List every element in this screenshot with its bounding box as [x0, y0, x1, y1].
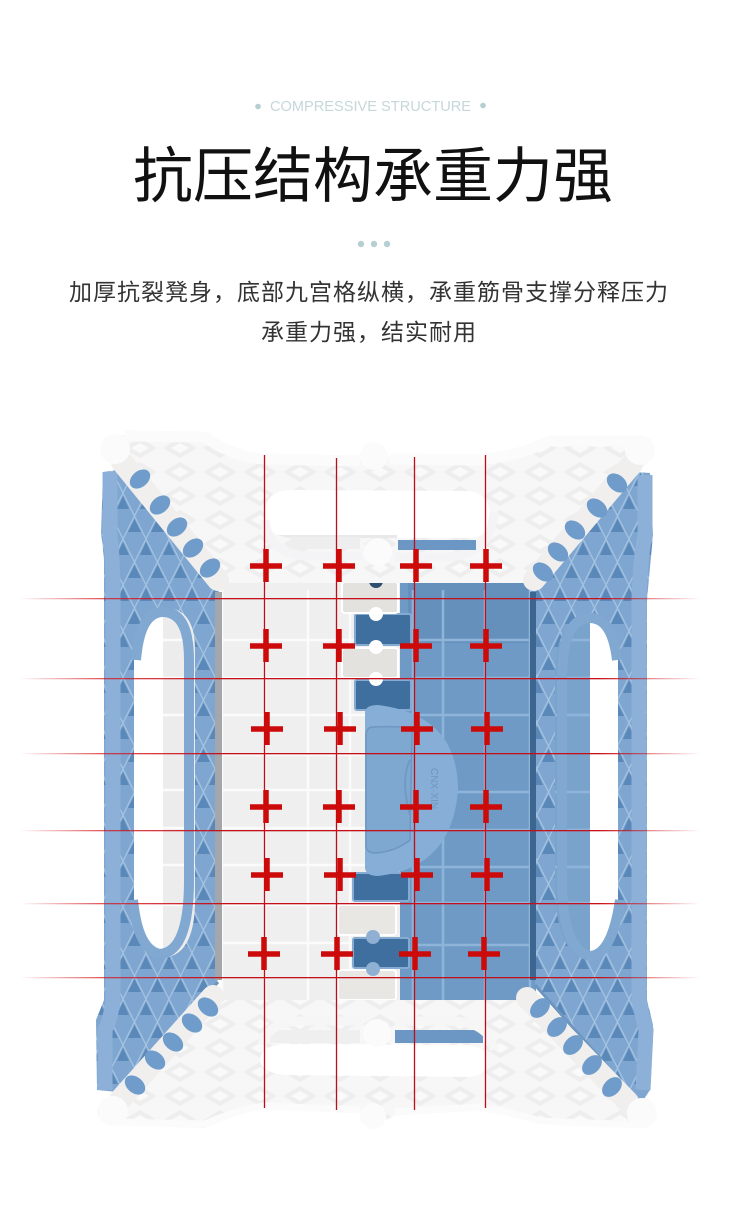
- eyebrow and divider dots: [255, 102, 486, 248]
- latch logo text: CNX·XIN: [428, 768, 439, 809]
- center latch disc: [365, 705, 458, 876]
- top seat with handle slot: [103, 435, 653, 583]
- center hinge blocks: [338, 574, 411, 1000]
- side panel: left blue mesh with handle: [96, 470, 222, 1094]
- side panel: right blue mesh with handle: [530, 472, 653, 1105]
- corner and center hinge knobs: [98, 434, 657, 1129]
- floor: blue half with grid: [400, 583, 590, 1003]
- rollers along the four seat hinges: [120, 462, 632, 1102]
- body text: 加厚抗裂凳身，底部九宫格纵横，承重筋骨支撑分释压力: [69, 279, 669, 305]
- red horizontal load lines: [20, 598, 700, 978]
- eyebrow: english subtitle: COMPRESSIVE STRUCTURE: [270, 99, 471, 115]
- title: 抗压结构承重力强: [133, 143, 613, 210]
- red vertical load lines: [264, 455, 486, 1110]
- floor: white half with grid: [163, 583, 402, 1003]
- red plus markers: [248, 549, 503, 970]
- bottom seat with handle slot: [97, 1000, 653, 1128]
- body text: 承重力强，结实耐用: [261, 319, 477, 345]
- body text: [69, 279, 669, 345]
